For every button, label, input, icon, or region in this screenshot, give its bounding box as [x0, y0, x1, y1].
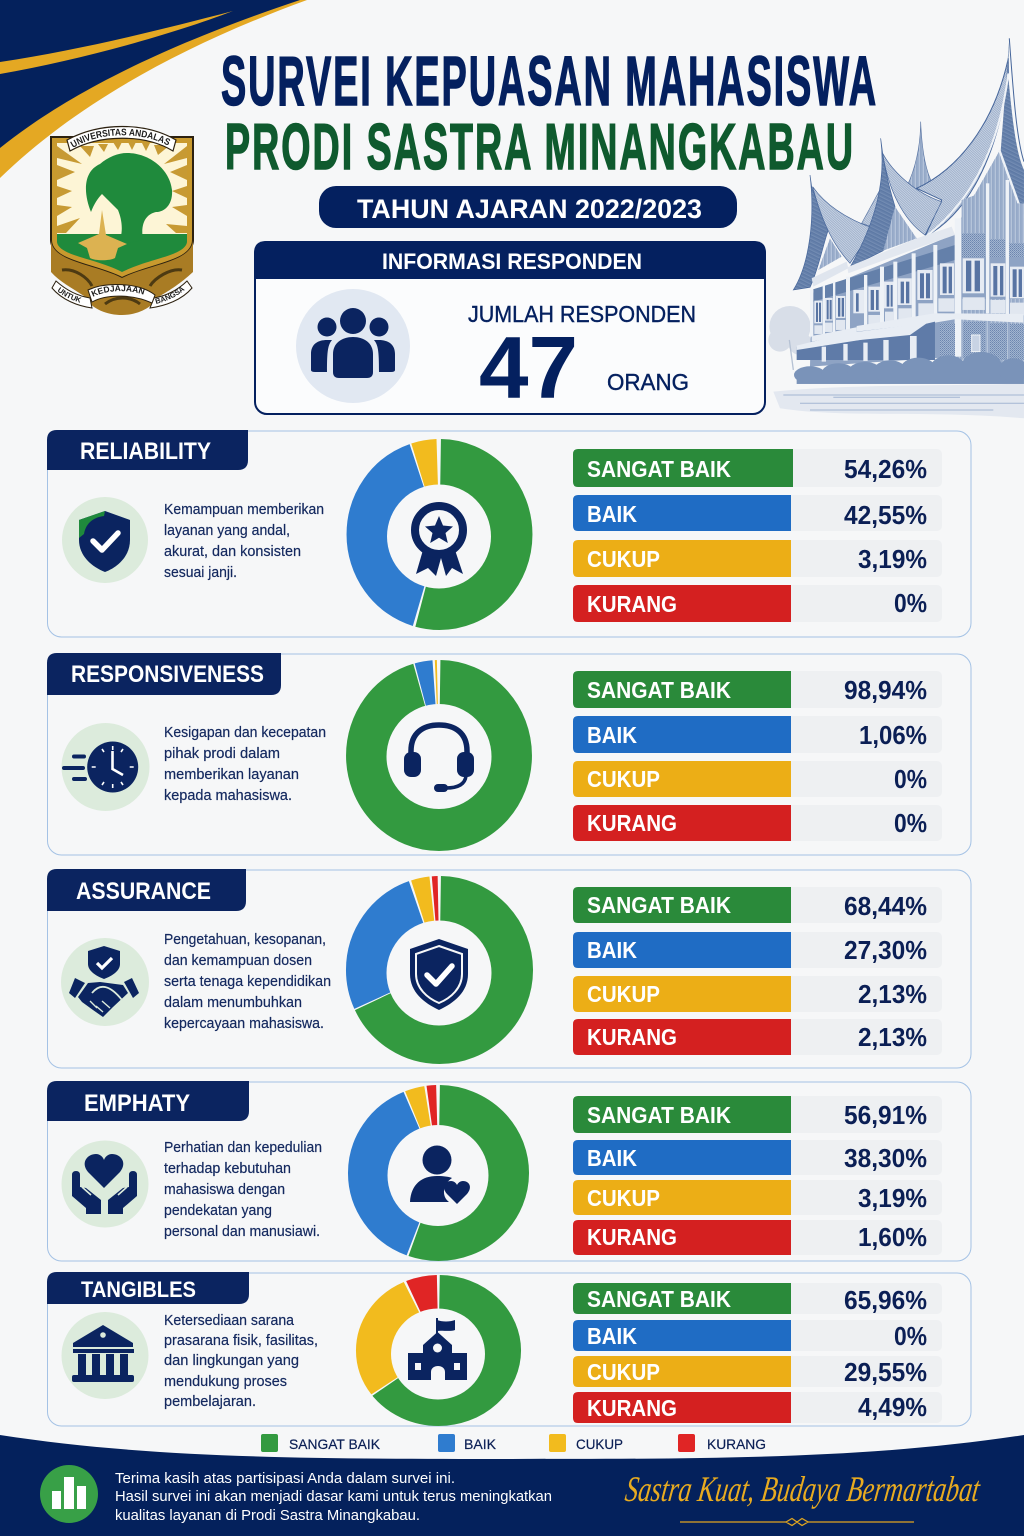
icon: shield: [62, 497, 148, 583]
description: Pengetahuan, kesopanan,: [164, 932, 326, 948]
icon: fast clock: [62, 723, 150, 811]
tab heading: [47, 869, 246, 911]
rating bars: BAIK: [587, 722, 637, 748]
description: prasarana fisik, fasilitas,: [164, 1333, 318, 1349]
description: Ketersediaan sarana: [164, 1313, 295, 1329]
rating bars: 98,94%: [844, 675, 927, 705]
university emblem: [50, 126, 194, 315]
description: kepercayaan mahasiswa.: [164, 1016, 324, 1032]
closing message: Terima kasih atas partisipasi Anda dalam survei ini.: [115, 1470, 455, 1487]
rating bars: 0%: [894, 808, 927, 838]
rating bars: KURANG: [587, 591, 677, 617]
rating bars: SANGAT BAIK: [587, 1102, 731, 1128]
tab heading: TANGIBLES: [81, 1277, 196, 1302]
description: dalam menumbuhkan: [164, 995, 302, 1011]
panel: emphaty: [47, 1081, 971, 1261]
rating bars: [573, 671, 942, 841]
rating bars: KURANG: [587, 810, 677, 836]
rating bars: CUKUP: [587, 1359, 660, 1385]
description: serta tenaga kependidikan: [164, 974, 331, 990]
university emblem: BANGSA: [155, 287, 185, 304]
rating bars: KURANG: [587, 1395, 677, 1421]
panel: tangibles: [47, 1272, 971, 1426]
legend: BAIK: [464, 1436, 497, 1452]
university emblem: UNTUK: [58, 287, 82, 303]
description: [164, 932, 331, 1032]
tab heading: [47, 1081, 249, 1121]
icon: handshake with shield: [61, 938, 149, 1026]
rating bars: 68,44%: [844, 891, 927, 921]
donut chart: [370, 463, 509, 606]
description: kepada mahasiswa.: [164, 788, 292, 804]
tab heading: [47, 430, 248, 470]
rating bars: 65,96%: [844, 1285, 927, 1315]
panel: assurance: [47, 869, 971, 1068]
description: Perhatian dan kepedulian: [164, 1140, 322, 1156]
rating bars: CUKUP: [587, 1185, 660, 1211]
description: [164, 1140, 322, 1240]
panel: informasi responden: JUMLAH RESPONDEN: [468, 301, 696, 327]
rating bars: BAIK: [587, 1145, 637, 1171]
description: pihak prodi dalam: [164, 746, 280, 762]
rating bars: CUKUP: [587, 766, 660, 792]
panel: responsiveness: [47, 653, 971, 855]
rating bars: 1,60%: [858, 1222, 927, 1252]
closing message: [115, 1470, 552, 1524]
tab heading: RESPONSIVENESS: [71, 661, 264, 688]
donut chart: [377, 1294, 500, 1407]
panel: informasi responden: [254, 241, 766, 417]
header swoosh: [0, 0, 307, 178]
description: memberikan layanan: [164, 767, 299, 783]
donut chart: [370, 900, 509, 1040]
slogan ornament: [680, 1518, 914, 1526]
rating bars: BAIK: [587, 1323, 637, 1349]
icon: person with heart: [410, 1146, 470, 1204]
rating bars: [573, 449, 942, 622]
rating bars: BAIK: [587, 501, 637, 527]
icon: people: [296, 289, 410, 403]
legend: SANGAT BAIK: [289, 1436, 381, 1452]
tab heading: ASSURANCE: [76, 878, 211, 905]
rating bars: KURANG: [587, 1024, 677, 1050]
panel: informasi responden: ORANG: [607, 369, 689, 395]
tab heading: EMPHATY: [84, 1090, 190, 1117]
rating bars: SANGAT BAIK: [587, 892, 731, 918]
description: akurat, dan konsisten: [164, 544, 301, 560]
icon: heart in hands: [62, 1140, 148, 1228]
description: dan lingkungan yang: [164, 1353, 299, 1369]
icon: bar chart badge: [40, 1465, 98, 1523]
description: mendukung proses: [164, 1374, 287, 1390]
donut chart: [371, 1107, 506, 1239]
tab heading: RELIABILITY: [80, 438, 211, 465]
university emblem: KEDJAJAAN: [91, 285, 145, 297]
rating bars: 4,49%: [858, 1392, 927, 1422]
rating bars: SANGAT BAIK: [587, 677, 731, 703]
closing message: Hasil survei ini akan menjadi dasar kami untuk terus meningkatkan: [115, 1488, 552, 1505]
rating bars: 3,19%: [858, 544, 927, 574]
rating bars: SANGAT BAIK: [587, 456, 731, 482]
rating bars: 2,13%: [858, 979, 927, 1009]
panel: informasi responden: INFORMASI RESPONDEN: [382, 249, 642, 274]
year pill: [319, 186, 737, 228]
rating bars: 54,26%: [844, 454, 927, 484]
rating bars: 2,13%: [858, 1022, 927, 1052]
description: [164, 502, 324, 581]
rating bars: 56,91%: [844, 1100, 927, 1130]
rating bars: 1,06%: [859, 720, 927, 750]
rating bars: 3,19%: [858, 1183, 927, 1213]
description: Kemampuan memberikan: [164, 502, 324, 518]
legend: [261, 1434, 766, 1452]
icon: award rosette: [415, 506, 463, 576]
illustration: rumah gadang: [768, 38, 1024, 418]
rating bars: 0%: [894, 1321, 927, 1351]
legend: CUKUP: [576, 1436, 623, 1452]
rating bars: CUKUP: [587, 546, 660, 572]
panel: reliability: [47, 430, 971, 637]
description: mahasiswa dengan: [164, 1182, 285, 1198]
description: [164, 1313, 318, 1410]
icon: school: [408, 1318, 467, 1380]
rating bars: KURANG: [587, 1224, 677, 1250]
description: sesuai janji.: [164, 565, 237, 581]
rating bars: 42,55%: [844, 500, 927, 530]
footer band: [0, 1435, 1024, 1536]
closing message: kualitas layanan di Prodi Sastra Minangkabau.: [115, 1507, 420, 1524]
description: pendekatan yang: [164, 1203, 272, 1219]
university emblem: UNIVERSITAS ANDALAS: [70, 128, 170, 147]
description: personal dan manusiawi.: [164, 1224, 320, 1240]
rating bars: BAIK: [587, 937, 637, 963]
description: dan kemampuan dosen: [164, 953, 312, 969]
rating bars: [573, 1283, 942, 1423]
legend: KURANG: [707, 1436, 766, 1452]
year pill: TAHUN AJARAN 2022/2023: [357, 194, 702, 224]
description: [164, 725, 326, 804]
rating bars: 27,30%: [844, 935, 927, 965]
rating bars: SANGAT BAIK: [587, 1286, 731, 1312]
description: Kesigapan dan kecepatan: [164, 725, 326, 741]
rating bars: [573, 887, 942, 1055]
tab heading: [47, 653, 281, 695]
tab heading: [47, 1272, 249, 1304]
donut chart: [370, 684, 508, 827]
rating bars: 0%: [894, 588, 927, 618]
description: pembelajaran.: [164, 1394, 256, 1410]
rating bars: [573, 1096, 942, 1255]
rating bars: CUKUP: [587, 981, 660, 1007]
icon: institution building: [62, 1312, 148, 1399]
icon: headset: [404, 725, 474, 792]
panel: informasi responden: 47: [479, 318, 578, 417]
rating bars: 38,30%: [844, 1143, 927, 1173]
icon: check shield: [410, 939, 468, 1010]
description: layanan yang andal,: [164, 523, 290, 539]
description: terhadap kebutuhan: [164, 1161, 291, 1177]
rating bars: 0%: [894, 764, 927, 794]
rating bars: 29,55%: [844, 1357, 927, 1387]
